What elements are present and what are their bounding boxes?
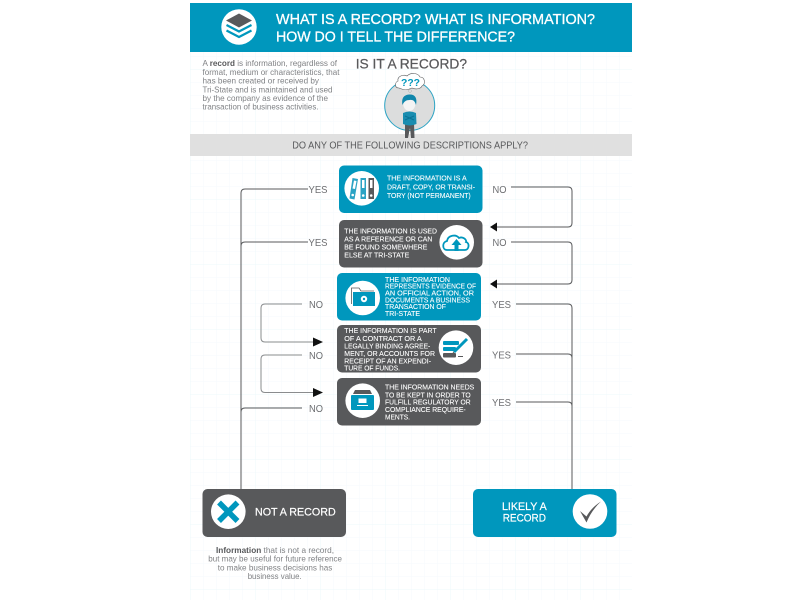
question band: DO ANY OF THE FOLLOWING DESCRIPTIONS APPLY? — [292, 141, 528, 152]
information note: but may be useful for future reference — [208, 554, 342, 564]
flow labels: NO — [492, 237, 506, 249]
question box 5: COMPLIANCE REQUIRE- — [385, 405, 466, 414]
question box 1: THE INFORMATION IS A — [387, 174, 468, 183]
flow labels: YES — [492, 349, 511, 361]
flow labels: NO — [309, 403, 323, 415]
question box 4: OF A CONTRACT OR A — [344, 334, 423, 343]
icon: folder with gear — [345, 281, 380, 315]
flow labels: NO — [492, 184, 506, 196]
title: HOW DO I TELL THE DIFFERENCE? — [276, 28, 515, 45]
question box 3 — [337, 273, 481, 320]
question box 3: REPRESENTS EVIDENCE OF — [385, 282, 476, 290]
icon: cloud upload — [439, 225, 474, 260]
icon: stacked layers — [221, 9, 257, 45]
flow labels: YES — [492, 397, 511, 409]
question box 5 — [337, 378, 481, 426]
question box 2: BE FOUND SOMEWHERE — [344, 243, 427, 252]
outcome: not a record: NOT A RECORD — [255, 507, 336, 519]
flow labels: YES — [308, 237, 328, 249]
information note — [208, 545, 342, 581]
flow lines: no between top questions — [490, 187, 572, 288]
icon: x mark — [211, 494, 246, 529]
definition text block: has been created or received by — [202, 76, 320, 86]
question box 2: ELSE AT TRI-STATE — [344, 251, 409, 260]
icon: file drawer — [345, 383, 380, 418]
question box 2: AS A REFERENCE OR CAN — [344, 235, 432, 244]
information note: Information that is not a record, — [216, 545, 334, 555]
arms — [405, 116, 414, 120]
flow lines: yes to not a record — [241, 189, 308, 489]
outcome: likely a record — [473, 489, 616, 537]
question box 3: TRANSACTION OF — [385, 302, 446, 311]
flow lines: yes to likely a record — [516, 304, 572, 489]
arrow — [490, 222, 497, 232]
question box 4: TURE OF FUNDS. — [344, 363, 400, 372]
question box 4: THE INFORMATION IS PART — [344, 326, 437, 335]
illustration: thinking person — [385, 73, 435, 138]
question box 1: TORY (NOT PERMANENT) — [387, 191, 471, 200]
legs — [405, 123, 414, 138]
question box 3: TRI-STATE — [385, 309, 420, 318]
question box 2 — [339, 220, 482, 268]
outcome: likely a record: LIKELY A — [502, 501, 547, 513]
definition text block: by the company as evidence of the — [202, 93, 328, 103]
question box 5: THE INFORMATION NEEDS — [385, 383, 474, 392]
definition text block: Tri-State and is maintained and used — [202, 84, 333, 94]
definition text block: transaction of business activities. — [202, 102, 318, 112]
flow labels: NO — [309, 299, 323, 311]
definition text block: A record is information, regardless of — [202, 58, 338, 68]
question box 2: THE INFORMATION IS USED — [344, 227, 437, 236]
flow labels: NO — [309, 350, 323, 362]
arrow — [313, 388, 323, 397]
arrow — [490, 280, 497, 288]
question box 3: AN OFFICIAL ACTION, OR — [385, 288, 474, 298]
information note: business value. — [248, 571, 302, 581]
arrow — [313, 338, 323, 346]
definition text block — [202, 58, 340, 112]
question box 5: TO BE KEPT IN ORDER TO — [385, 390, 471, 399]
question box 3: DOCUMENTS A BUSINESS — [385, 296, 470, 304]
question box 3: THE INFORMATION — [385, 275, 450, 284]
question band — [190, 134, 632, 156]
title: WHAT IS A RECORD? WHAT IS INFORMATION? — [276, 11, 595, 28]
question box 4: LEGALLY BINDING AGREE- — [344, 342, 431, 351]
flow labels — [308, 184, 511, 415]
head — [403, 97, 415, 111]
question box 5: MENTS. — [385, 413, 410, 422]
header banner — [190, 3, 632, 52]
flow labels: YES — [308, 184, 328, 196]
question box 5: FULFILL REGULATORY OR — [385, 398, 471, 407]
thought cloud: ??? — [401, 78, 420, 89]
title — [276, 11, 595, 45]
question box 1: DRAFT, COPY, OR TRANSI- — [387, 182, 475, 191]
flow labels: YES — [492, 299, 511, 311]
information note: to make business decisions has — [218, 562, 332, 572]
question box 1 — [339, 166, 482, 213]
icon: check mark — [573, 494, 607, 529]
outcome: not a record — [202, 489, 346, 537]
icon: binders — [344, 171, 379, 206]
heading: is it a record: IS IT A RECORD? — [356, 55, 467, 71]
torso — [403, 112, 416, 126]
question box 4: RECEIPT OF AN EXPENDI- — [344, 356, 431, 365]
hair — [402, 94, 416, 105]
icon: form and pencil — [439, 330, 473, 365]
flow lines: no between lower questions — [261, 304, 323, 397]
definition text block: format, medium or characteristics, that — [202, 67, 340, 77]
question box 4 — [337, 325, 481, 372]
question box 4: MENT, OR ACCOUNTS FOR — [344, 349, 435, 358]
outcome: likely a record: RECORD — [503, 512, 546, 524]
